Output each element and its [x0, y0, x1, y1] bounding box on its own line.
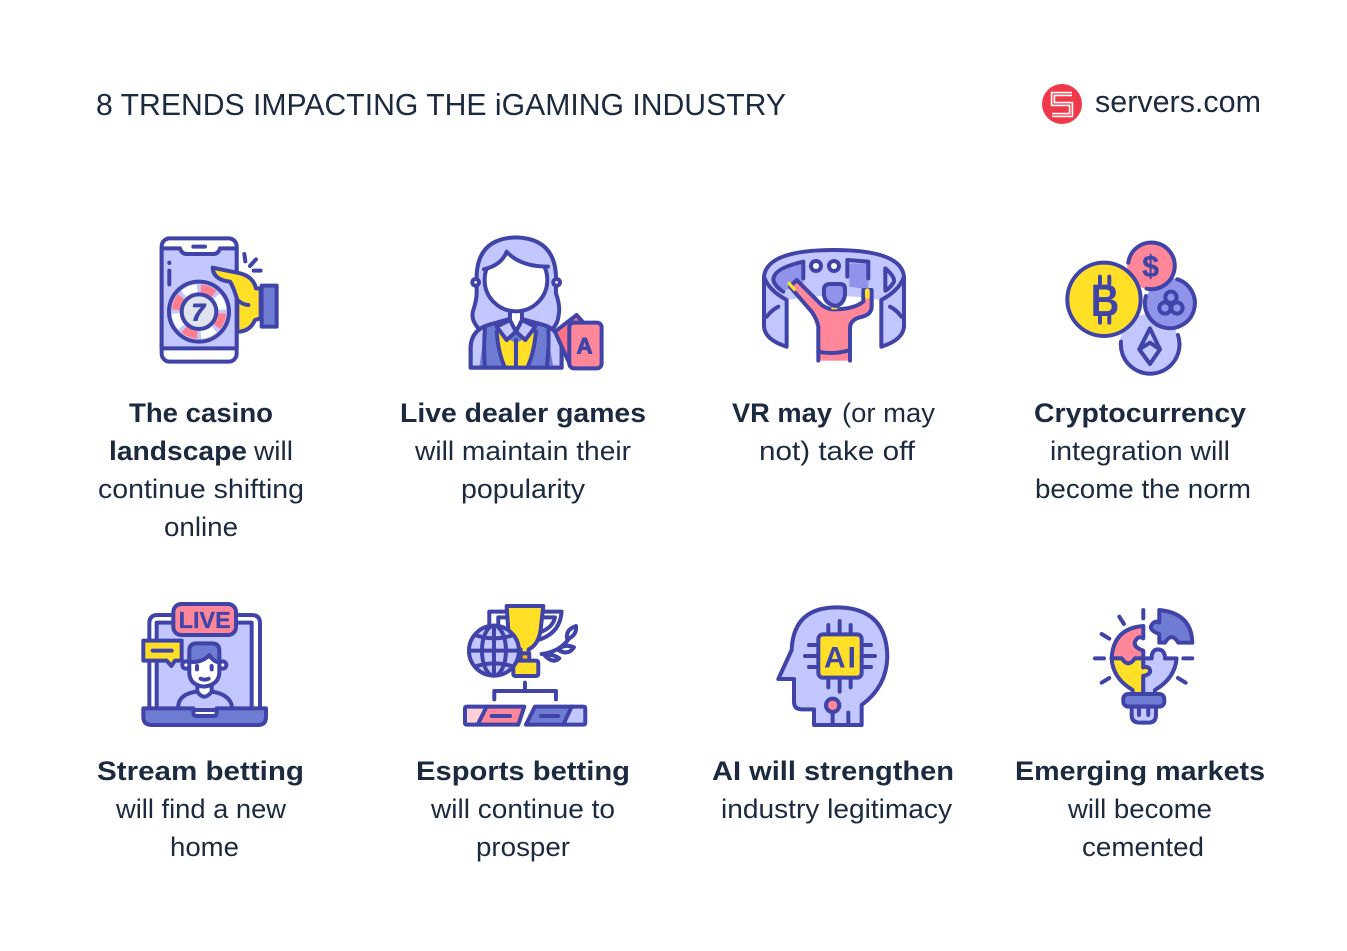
- icon: AI head: [778, 607, 887, 725]
- caption: casino landscape: [98, 398, 304, 542]
- panel: esports betting: [416, 606, 630, 862]
- caption: esports betting: prosper: [476, 832, 570, 862]
- caption: VR: VR may: [732, 398, 832, 428]
- logo: servers.com: servers.com: [1095, 84, 1261, 119]
- caption: AI: industry legitimacy: [721, 794, 953, 824]
- icon: live stream laptop: [143, 604, 266, 725]
- caption: casino landscape: continue shifting: [98, 474, 304, 504]
- icon: puzzle light bulb: [1095, 610, 1192, 723]
- panel: VR: [732, 250, 935, 466]
- caption: VR: (or may: [842, 398, 935, 428]
- caption: emerging markets: Emerging markets: [1015, 756, 1265, 786]
- icon: trophy, globe and bracket: [465, 606, 585, 725]
- caption: esports betting: [416, 756, 630, 862]
- caption: emerging markets: [1015, 756, 1265, 862]
- title: 8 TRENDS IMPACTING THE iGAMING INDUSTRY: [96, 87, 786, 122]
- caption: live dealer games: will maintain their: [414, 436, 631, 466]
- caption: esports betting: will continue to: [430, 794, 615, 824]
- caption: cryptocurrency: integration will: [1050, 436, 1230, 466]
- caption: emerging markets: will become: [1067, 794, 1212, 824]
- card letter: A: [577, 333, 593, 358]
- caption: emerging markets: cemented: [1082, 832, 1204, 862]
- logo: servers.com: [1042, 84, 1261, 124]
- caption: live dealer games: [400, 398, 646, 504]
- icon: live dealer with cards: [471, 237, 602, 368]
- caption: casino landscape: landscape: [109, 436, 247, 466]
- live label: LIVE: [179, 607, 231, 633]
- caption: stream betting: [97, 756, 304, 862]
- caption: casino landscape: online: [164, 512, 238, 542]
- caption: cryptocurrency: become the norm: [1035, 474, 1251, 504]
- panel: AI: [712, 607, 954, 824]
- icon: crypto coins: [1067, 242, 1196, 374]
- caption: cryptocurrency: Cryptocurrency: [1034, 398, 1246, 428]
- dollar sign: $: [1142, 250, 1159, 284]
- chip label: AI: [824, 641, 856, 674]
- caption: AI: [712, 756, 954, 824]
- bitcoin sign: B: [1091, 275, 1119, 326]
- chip number: 7: [192, 300, 207, 327]
- caption: stream betting: will find a new: [115, 794, 287, 824]
- caption: stream betting: home: [170, 832, 239, 862]
- caption: casino landscape: The casino: [129, 398, 273, 428]
- caption: esports betting: Esports betting: [416, 756, 630, 786]
- caption: AI: AI will strengthen: [712, 756, 954, 786]
- icon: VR surround display with person: [764, 250, 904, 361]
- panel: cryptocurrency: [1034, 242, 1251, 504]
- panel: live dealer games: [400, 237, 646, 504]
- panel: stream betting: [97, 604, 304, 862]
- panel: emerging markets: [1015, 610, 1265, 862]
- caption: cryptocurrency: [1034, 398, 1251, 504]
- panel: casino landscape: [98, 238, 304, 542]
- caption: VR: [732, 398, 935, 466]
- caption: live dealer games: popularity: [461, 474, 586, 504]
- icon: phone with casino chip: [162, 238, 277, 362]
- caption: live dealer games: Live dealer games: [400, 398, 646, 428]
- caption: casino landscape: will: [253, 436, 293, 466]
- caption: stream betting: Stream betting: [97, 756, 304, 786]
- caption: VR: not) take off: [759, 436, 916, 466]
